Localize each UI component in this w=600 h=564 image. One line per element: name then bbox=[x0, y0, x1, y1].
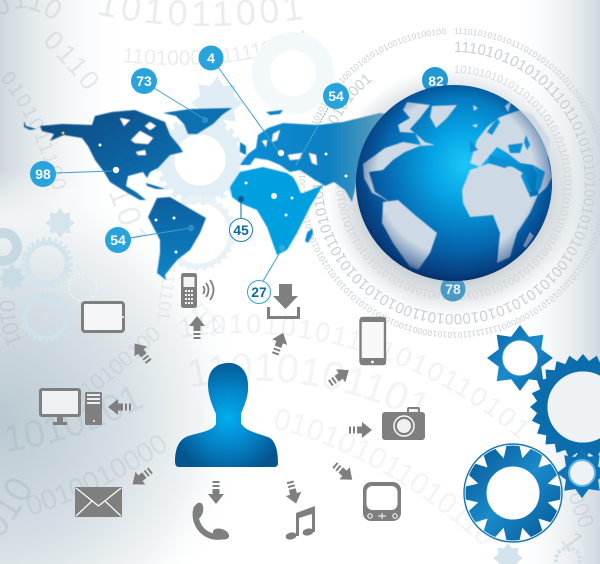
line: 54 South America bbox=[130, 228, 191, 238]
gear: top pale bbox=[261, 41, 325, 105]
arrow: to media player bbox=[329, 459, 357, 486]
map: North America bbox=[40, 110, 183, 200]
line: 73 bbox=[154, 88, 206, 120]
background binary digits: 1010201 bbox=[6, 386, 144, 452]
icon: envelope bbox=[75, 487, 122, 517]
background binary digits: 0110 bbox=[46, 32, 98, 88]
dots: anchors bbox=[62, 117, 285, 251]
map: Greenland bbox=[163, 108, 232, 134]
badge: 4: 4 bbox=[207, 50, 215, 66]
background binary digits: 1010100100 bbox=[81, 327, 160, 402]
arrow: to download bbox=[268, 330, 291, 357]
land: Eurasia bbox=[470, 110, 552, 195]
land: Africa bbox=[462, 163, 538, 263]
map: Africa bbox=[230, 167, 323, 255]
gears: bottom pale bbox=[493, 543, 580, 564]
globe bbox=[356, 85, 552, 281]
badge: 98: 98 bbox=[35, 166, 51, 182]
globe: Madagascar highlight bbox=[523, 232, 534, 248]
blue gears bbox=[464, 325, 600, 542]
background binary digits: 010101011010110 bbox=[275, 410, 492, 544]
icon: camera bbox=[382, 408, 425, 440]
badge: 27: 27 bbox=[251, 284, 267, 300]
arrow: to camera bbox=[349, 422, 372, 438]
map: Red Sea bbox=[293, 174, 304, 193]
line: 27 bbox=[263, 254, 279, 281]
badge: 45 bbox=[230, 218, 252, 242]
badge: 4 bbox=[198, 46, 224, 70]
land: Greenland bbox=[430, 105, 457, 128]
background binary digits: 1 bbox=[554, 525, 591, 558]
globe: ocean bbox=[356, 85, 552, 281]
icon: tablet bbox=[82, 302, 124, 332]
icon: desktop computer bbox=[40, 390, 102, 425]
icon: mobile phone with signal bbox=[181, 273, 214, 308]
line: 4 bbox=[218, 67, 281, 155]
ring: inner: 1010101010110101101010110101011010101010010101001010101010100101010101010101010100101010101010 bbox=[336, 66, 572, 300]
map: Caribbean bbox=[146, 183, 166, 189]
map: Madagascar bbox=[305, 228, 313, 243]
land: North America bbox=[363, 102, 435, 204]
map: Iceland and UK bbox=[240, 110, 283, 155]
badge: 73 bbox=[131, 68, 157, 94]
arrow: to tablet bbox=[128, 339, 155, 367]
badge: 54 Asia: 54 bbox=[328, 88, 344, 104]
globe: rim shading bbox=[356, 85, 552, 281]
arrow: to music bbox=[282, 479, 304, 506]
badge: 54 Asia bbox=[323, 83, 349, 109]
icon: media player bbox=[363, 482, 401, 521]
land: South America bbox=[382, 200, 437, 270]
badge: 78: 78 bbox=[445, 281, 461, 297]
gear: behind Greenland bbox=[191, 77, 243, 129]
line: 98 bbox=[55, 171, 112, 173]
gear: top star bbox=[487, 325, 553, 391]
background binary digits: 0010010000 bbox=[27, 435, 166, 514]
dots: white bbox=[98, 144, 348, 254]
icon: download bbox=[267, 284, 300, 319]
arrow: to mobile phone bbox=[189, 316, 205, 339]
gear: behind South America bbox=[162, 197, 234, 269]
background binary digits: 110100011111111111 bbox=[124, 30, 304, 65]
binary rings around globe bbox=[299, 28, 600, 338]
map: South America bbox=[148, 197, 206, 280]
map: Alaska islands bbox=[24, 121, 36, 130]
arrows from person to devices bbox=[108, 316, 372, 506]
map: inland seas bbox=[262, 130, 317, 165]
background binary digits: 101 bbox=[109, 193, 146, 240]
icon: telephone handset bbox=[191, 501, 231, 542]
line: 45 bbox=[240, 199, 242, 218]
icon: smartphone bbox=[360, 317, 386, 365]
arrow: to smartphone bbox=[325, 364, 353, 390]
gears: left cluster bbox=[0, 208, 97, 341]
globe shadow bbox=[327, 67, 577, 317]
badge: 45: 45 bbox=[233, 222, 249, 238]
background binary digits: 11110 bbox=[192, 300, 224, 336]
gear: behind North Atlantic bbox=[158, 118, 242, 202]
globe: seas bbox=[470, 118, 545, 192]
badge: 78 bbox=[440, 276, 466, 302]
map: Eurasia bbox=[240, 113, 395, 202]
ring: middle: 11101010101011101101010101001010101001010101010100010110010101010101101010100101010101001 bbox=[312, 42, 596, 324]
background binary digits: 1101010101101010110101 bbox=[180, 314, 528, 439]
background binary digits: 000 bbox=[563, 488, 599, 531]
map: Hudson Bay and Great Lakes bbox=[120, 118, 156, 155]
globe: land bbox=[363, 100, 552, 270]
callout lines and map dots bbox=[55, 67, 348, 281]
gear: right large bbox=[530, 354, 600, 460]
gear: bottom centre with notches bbox=[464, 444, 562, 542]
badge: 27 bbox=[248, 280, 270, 304]
badge: 82 bbox=[422, 67, 448, 93]
arrow: to handset bbox=[208, 481, 224, 504]
land: Iceland and UK bbox=[472, 100, 512, 128]
badge: 54 South America: 54 bbox=[110, 232, 126, 248]
badge: 54 South America bbox=[105, 227, 131, 253]
line: 54 Asia bbox=[296, 108, 328, 165]
badge: 73: 73 bbox=[136, 73, 152, 89]
world map bbox=[24, 108, 395, 280]
gear: right small star bbox=[557, 448, 600, 498]
background binary digits: 1111101 bbox=[157, 262, 176, 319]
background binary digits: 11010101101 bbox=[190, 353, 426, 412]
icon: music note bbox=[285, 506, 315, 541]
arrow: to mail bbox=[128, 464, 156, 491]
arrow: to computer bbox=[108, 399, 131, 415]
person silhouette bbox=[175, 363, 278, 467]
badge: 82: 82 bbox=[428, 73, 444, 89]
badge: 98 bbox=[30, 161, 56, 187]
